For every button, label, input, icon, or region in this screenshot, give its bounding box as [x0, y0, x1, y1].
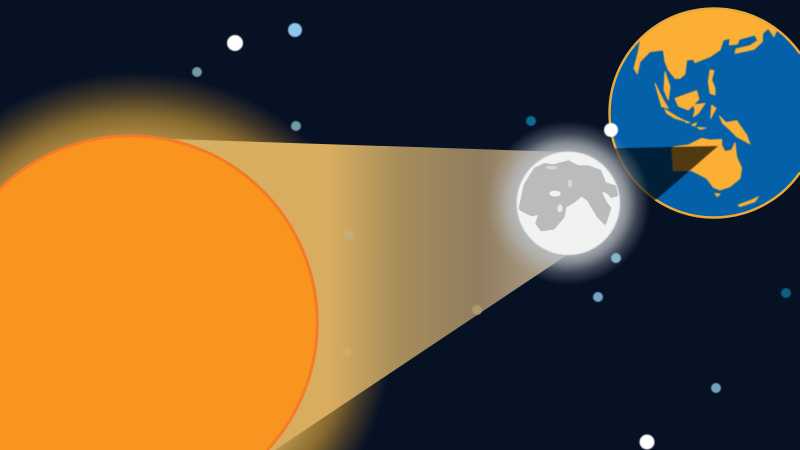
star: grey blue: [192, 67, 202, 77]
sun: [0, 136, 317, 450]
stars: [192, 23, 791, 450]
star: white at earth limb: [604, 123, 618, 137]
star: white: [227, 35, 243, 51]
sun glow: [0, 70, 395, 450]
moon: [517, 152, 620, 255]
sun disc: [0, 136, 317, 450]
star: white bottom: [640, 434, 654, 450]
star: pale near moon: [611, 253, 621, 263]
earth landmasses: [633, 0, 777, 207]
moon glow: [486, 121, 650, 285]
earth ocean disc: [610, 8, 800, 217]
star: light blue: [288, 23, 302, 37]
star: pale lower right: [711, 383, 721, 393]
earth rim: [610, 8, 800, 217]
moon disc: [517, 152, 620, 255]
moon shadow on earth: [614, 145, 718, 200]
light beam from sun to moon: [170, 139, 567, 450]
sun rim: [0, 136, 317, 450]
star: faint in beam: [472, 305, 482, 315]
star: teal: [526, 116, 536, 126]
star: teal right: [781, 288, 791, 298]
star: faint in beam lower: [341, 347, 351, 357]
star: grey blue near beam: [291, 121, 301, 131]
earth: [606, 0, 800, 217]
star: faint in beam upper: [344, 230, 354, 240]
moon maria: [520, 162, 617, 230]
star: pale below moon: [593, 292, 603, 302]
